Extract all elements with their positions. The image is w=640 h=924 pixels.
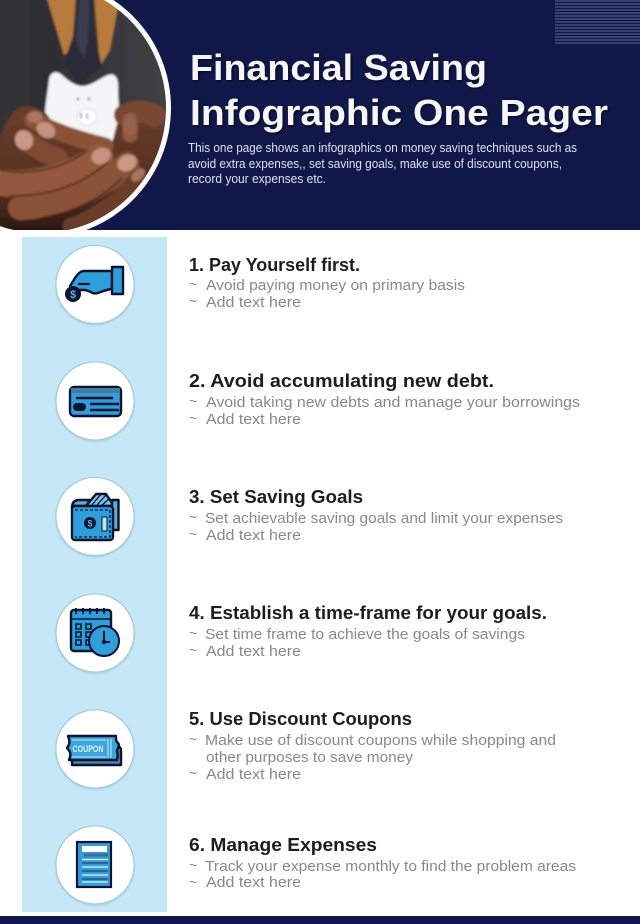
decorative stripes xyxy=(555,1,640,43)
item 4: establish a time-frame: ~ xyxy=(189,625,197,641)
item 5: use discount coupons: 5. Use Discount Coupons xyxy=(189,709,412,729)
item 3: set saving goals: Add text here xyxy=(206,527,301,544)
item 1: pay yourself first: Avoid paying money on primary basis xyxy=(206,277,465,294)
description: This one page shows an infographics on money saving techniques such as xyxy=(188,140,577,155)
item 2: avoid accumulating new debt: Avoid taking new debts and manage your borrowings xyxy=(206,394,580,411)
description xyxy=(188,140,577,186)
item 5: use discount coupons: ~ xyxy=(189,731,197,747)
item 6: manage expenses: Track your expense monthly to find the problem areas xyxy=(205,858,576,875)
item 5: use discount coupons: other purposes to save money xyxy=(206,749,413,766)
item 1: pay yourself first xyxy=(189,255,465,311)
title: Financial Saving xyxy=(190,47,487,88)
icon: wallet with cash xyxy=(56,478,134,556)
item 2: avoid accumulating new debt: 2. Avoid accumulating new debt. xyxy=(189,371,494,391)
icon: discount coupon: COUPON xyxy=(72,744,104,754)
item 4: establish a time-frame: 4. Establish a time-frame for your goals. xyxy=(189,603,547,623)
item 5: use discount coupons: Make use of discount coupons while shopping and xyxy=(205,732,556,749)
item 6: manage expenses xyxy=(189,835,576,891)
item 2: avoid accumulating new debt: Add text here xyxy=(206,411,301,428)
item 1: pay yourself first: 1. Pay Yourself first. xyxy=(189,255,360,275)
item 3: set saving goals: ~ xyxy=(189,526,197,542)
item 4: establish a time-frame: Add text here xyxy=(206,643,301,660)
photo: hands holding a white piggy bank xyxy=(0,0,171,240)
item 1: pay yourself first: Add text here xyxy=(206,294,301,311)
item 5: use discount coupons: ~ xyxy=(189,765,197,781)
icon: hand giving a coin xyxy=(56,246,134,324)
item 5: use discount coupons: Add text here xyxy=(206,766,301,783)
item 3: set saving goals xyxy=(189,487,563,544)
icon: expense receipt xyxy=(56,826,134,904)
item 2: avoid accumulating new debt: ~ xyxy=(189,393,197,409)
icon: discount coupon xyxy=(56,710,134,788)
footer bar xyxy=(0,916,640,924)
item 2: avoid accumulating new debt: ~ xyxy=(189,410,197,426)
header banner xyxy=(0,0,640,230)
item 3: set saving goals: Set achievable saving goals and limit your expenses xyxy=(205,510,563,527)
item 1: pay yourself first: ~ xyxy=(189,276,197,292)
description: avoid extra expenses,, set saving goals, make use of discount coupons, xyxy=(188,156,562,171)
icon: credit card xyxy=(56,362,134,440)
item 2: avoid accumulating new debt xyxy=(189,371,580,428)
item 3: set saving goals: ~ xyxy=(189,509,197,525)
left icon column panel xyxy=(22,237,167,912)
icon: calendar with clock xyxy=(56,594,134,672)
title xyxy=(190,47,608,133)
item 6: manage expenses: Add text here xyxy=(206,874,301,891)
icon: wallet with cash: $ xyxy=(87,518,93,528)
item 5: use discount coupons xyxy=(189,709,556,783)
item 4: establish a time-frame xyxy=(189,603,547,660)
description: record your expenses etc. xyxy=(188,171,326,186)
item 6: manage expenses: ~ xyxy=(189,874,197,890)
item 6: manage expenses: 6. Manage Expenses xyxy=(189,835,377,855)
item 3: set saving goals: 3. Set Saving Goals xyxy=(189,487,363,507)
item 4: establish a time-frame: ~ xyxy=(189,642,197,658)
icon: hand giving a coin: $ xyxy=(70,289,76,301)
item 4: establish a time-frame: Set time frame to achieve the goals of savings xyxy=(205,626,525,643)
item 6: manage expenses: ~ xyxy=(189,857,197,873)
title: Infographic One Pager xyxy=(190,92,608,133)
item 1: pay yourself first: ~ xyxy=(189,293,197,309)
